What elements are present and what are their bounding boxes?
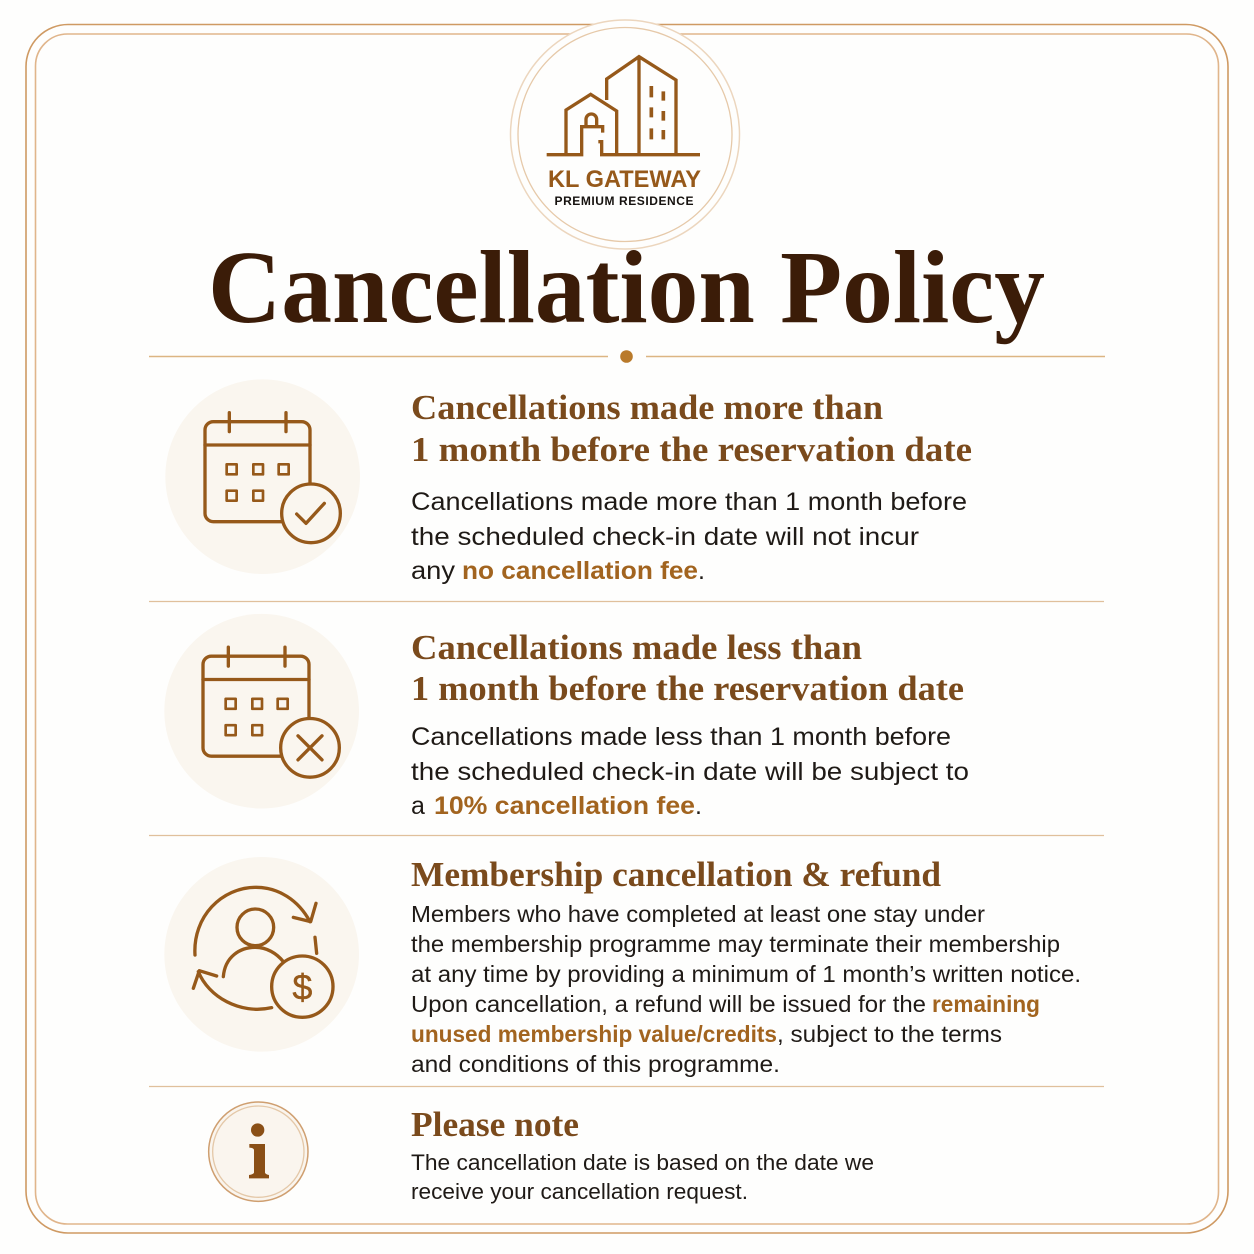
- heading: 1 month before the reservation date: [411, 430, 972, 469]
- title divider with dot: [149, 350, 1105, 363]
- body text: remaining: [932, 991, 1040, 1017]
- body text: and conditions of this programme.: [411, 1051, 780, 1077]
- divider: [149, 834, 1104, 836]
- body text: Cancellations made more than 1 month before: [411, 488, 967, 516]
- body text: the scheduled check-in date will be subject to: [411, 758, 969, 786]
- body text: Cancellations made less than 1 month before: [411, 723, 951, 751]
- divider: [149, 1086, 1104, 1088]
- body text: the scheduled check-in date will not incur: [411, 523, 919, 551]
- body text: [411, 901, 1081, 1077]
- body text: no cancellation fee: [462, 557, 698, 585]
- icon: calendar with cross: [164, 614, 359, 808]
- icon: buildings: [547, 57, 700, 155]
- body text: The cancellation date is based on the date we: [411, 1150, 874, 1175]
- panel: membership: [164, 855, 1081, 1077]
- heading: Membership cancellation & refund: [411, 855, 942, 894]
- logo tagline: PREMIUM RESIDENCE: [554, 194, 694, 208]
- panel: please note: [209, 1102, 874, 1204]
- heading: 1 month before the reservation date: [411, 669, 964, 708]
- heading: Cancellations made more than: [411, 388, 883, 427]
- body text: any: [411, 557, 456, 585]
- body text: [411, 723, 969, 820]
- body text: 10% cancellation fee: [434, 792, 695, 820]
- dollar sign: $: [292, 966, 312, 1007]
- body text: , subject to the terms: [777, 1021, 1002, 1047]
- heading: Cancellations made less than: [411, 628, 862, 667]
- body text: [411, 488, 967, 585]
- logo badge: [510, 20, 740, 249]
- panel: less than 1 month: [164, 614, 969, 820]
- divider: [149, 600, 1104, 602]
- icon: member refund: [164, 857, 359, 1052]
- panel: more than 1 month: [165, 379, 972, 585]
- body text: at any time by providing a minimum of 1 month’s written notice.: [411, 961, 1081, 987]
- body text: Upon cancellation, a refund will be issued for the: [411, 991, 926, 1017]
- body text: unused membership value/credits: [411, 1021, 777, 1047]
- body text: .: [698, 557, 705, 585]
- heading: Please note: [411, 1105, 579, 1144]
- icon: calendar with check: [165, 379, 360, 574]
- body text: .: [695, 792, 702, 820]
- body text: the membership programme may terminate their membership: [411, 931, 1060, 957]
- heading: [411, 628, 964, 708]
- icon: info: [209, 1102, 308, 1201]
- logo name: KL GATEWAY: [548, 166, 701, 193]
- body text: [411, 1150, 874, 1204]
- heading: [411, 388, 972, 469]
- body text: Members who have completed at least one stay under: [411, 901, 985, 927]
- body text: receive your cancellation request.: [411, 1179, 748, 1204]
- title: Cancellation Policy: [208, 230, 1045, 345]
- body text: a: [411, 792, 425, 820]
